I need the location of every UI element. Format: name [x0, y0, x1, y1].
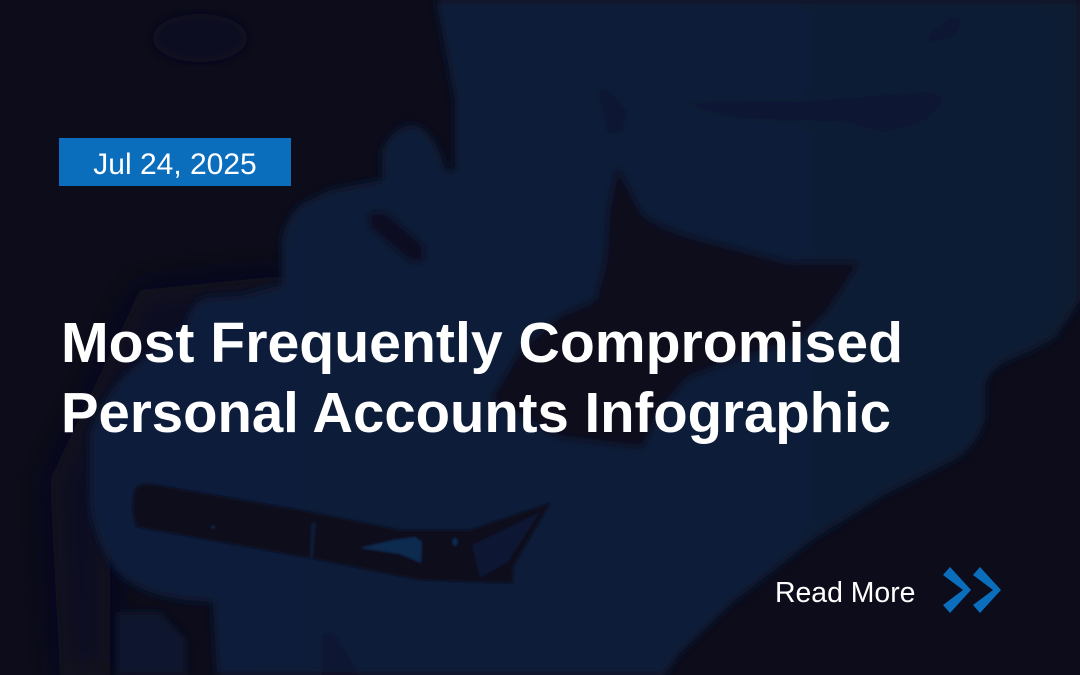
finger shadow slit — [368, 211, 424, 262]
phone edge — [133, 484, 550, 583]
title — [61, 311, 903, 445]
dark slit upper — [597, 85, 628, 133]
title: Personal Accounts Infographic — [61, 381, 891, 445]
left faint halo — [50, 275, 290, 675]
lower-left dark speckle area — [117, 612, 186, 675]
dark wedge behind phone — [490, 165, 860, 448]
read more label: Read More — [775, 577, 915, 609]
title: Most Frequently Compromised — [61, 311, 903, 375]
date badge — [59, 138, 291, 186]
date badge: Jul 24, 2025 — [93, 148, 257, 181]
dark stripe on arm — [671, 92, 946, 133]
lower hand crease — [322, 630, 360, 675]
top blob — [153, 14, 247, 62]
